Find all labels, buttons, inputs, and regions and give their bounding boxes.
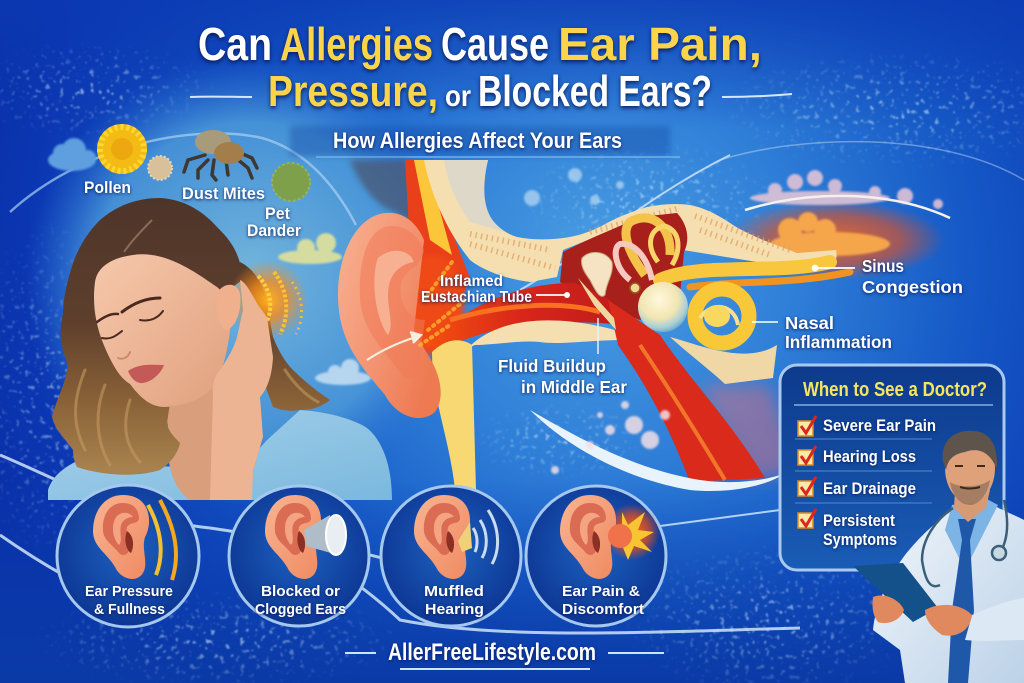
symptom: ear pressure: & Fullness xyxy=(94,601,165,618)
hair left and top xyxy=(52,198,258,475)
neck xyxy=(954,490,990,522)
label: pet dander: Pet xyxy=(265,204,290,223)
label: sinus congestion: Congestion xyxy=(862,277,963,297)
checklist: Severe Ear Pain xyxy=(823,417,936,435)
label: sinus congestion xyxy=(812,256,963,297)
ear xyxy=(216,285,240,330)
symptom: ear pain xyxy=(526,486,666,626)
tube highlight xyxy=(450,305,600,320)
pointer line: tube xyxy=(536,292,570,298)
label: pet dander xyxy=(247,204,301,240)
icon: pet dander xyxy=(272,163,310,201)
sinus glow xyxy=(725,200,945,280)
pink shade beside tube xyxy=(700,385,800,480)
symptom: blocked ears: Clogged Ears xyxy=(255,601,346,618)
symptom: blocked ears: Blocked or xyxy=(261,583,340,600)
label: inflamed eustachian tube: Inflamed xyxy=(440,273,503,290)
subtitle: How Allergies Affect Your Ears xyxy=(333,128,622,153)
label: nasal inflammation xyxy=(752,313,892,352)
eardrum xyxy=(578,278,616,330)
bone pale band xyxy=(444,160,505,232)
label: fluid buildup: Fluid Buildup xyxy=(498,356,606,376)
allergen dome xyxy=(10,55,475,505)
subtitle xyxy=(290,126,680,157)
doctor hands xyxy=(873,595,972,636)
label: pet dander: Dander xyxy=(247,221,301,240)
title xyxy=(198,18,762,116)
cochlea xyxy=(695,289,749,343)
symptom: ear pain: Discomfort xyxy=(562,601,644,618)
icon: pollen grain xyxy=(148,156,172,180)
lower bone xyxy=(468,320,624,348)
icon: yellow cloud xyxy=(278,233,342,264)
mouth xyxy=(128,365,164,383)
lower right bone xyxy=(670,337,777,384)
curved white band xyxy=(530,410,790,491)
yellow tissue stripe xyxy=(414,160,452,255)
outer ear xyxy=(338,213,441,418)
label: nasal inflammation: Nasal xyxy=(785,313,834,333)
neck and chest xyxy=(160,385,262,500)
eustachian tube xyxy=(425,283,620,350)
ear pain glow xyxy=(228,260,308,340)
woman with ear pain xyxy=(48,198,392,500)
doctor xyxy=(853,431,1024,683)
panel: symptom circles xyxy=(57,485,666,627)
label: fluid buildup xyxy=(498,356,627,397)
title: Cause xyxy=(441,18,549,70)
hair highlights xyxy=(76,370,318,465)
symptom: ear pressure xyxy=(57,485,199,627)
checklist: Persistent xyxy=(823,512,895,530)
checklist: Hearing Loss xyxy=(823,448,916,466)
icon: pollen flower xyxy=(97,124,147,174)
upper white particle cluster xyxy=(524,168,624,206)
head xyxy=(945,433,995,503)
label: inflamed eustachian tube xyxy=(421,273,532,306)
checklist xyxy=(795,416,936,549)
bone pores xyxy=(470,208,790,268)
right orange cloud xyxy=(770,212,890,256)
shirt xyxy=(48,410,392,500)
label: pollen: Pollen xyxy=(84,178,131,197)
inner fold highlight xyxy=(374,251,414,335)
label: sinus congestion: Sinus xyxy=(862,256,904,276)
checklist: Ear Drainage xyxy=(823,480,916,498)
arrow into ear canal xyxy=(367,332,421,360)
panel: when to see a doctor xyxy=(780,365,1004,570)
descending yellow tube xyxy=(432,340,476,490)
checklist: Symptoms xyxy=(823,531,897,549)
inflamed splatter xyxy=(400,255,464,355)
label: inflamed eustachian tube: Eustachian Tube xyxy=(421,289,532,306)
label: dust mites: Dust Mites xyxy=(182,184,265,203)
stapes xyxy=(630,283,640,293)
title side rules xyxy=(190,94,792,97)
hand and arm xyxy=(210,280,273,500)
hair right lock xyxy=(240,262,330,411)
pink clouds xyxy=(750,170,943,209)
tube orange highlight xyxy=(640,345,725,480)
symptom: muffled hearing: Muffled xyxy=(424,583,484,600)
website footer: AllerFreeLifestyle.com xyxy=(388,639,596,666)
upper bone xyxy=(424,160,837,282)
lower background shading xyxy=(0,480,1024,683)
ossicle xyxy=(581,252,612,296)
icon: dust mite xyxy=(184,130,257,180)
icon: cloud xyxy=(48,138,96,171)
symptom: ear pain: Ear Pain & xyxy=(562,583,640,600)
stethoscope xyxy=(922,500,1007,586)
pointer line: fluid xyxy=(597,318,599,354)
hair xyxy=(943,431,997,470)
hair parting xyxy=(124,220,152,252)
descending red tube xyxy=(608,300,765,482)
outer ear inner fold xyxy=(360,226,425,379)
top background shading xyxy=(0,0,1024,130)
hair behind anatomy xyxy=(350,160,416,225)
face xyxy=(94,254,232,407)
title: Allergies xyxy=(280,18,433,70)
title: Blocked Ears? xyxy=(478,67,712,116)
eyes and mouth xyxy=(955,466,985,488)
title: or xyxy=(445,80,471,113)
upper white band xyxy=(745,196,950,218)
symptom: muffled hearing xyxy=(381,486,521,626)
symptom: blocked ears xyxy=(229,486,369,626)
title: Pressure, xyxy=(268,67,438,116)
symptom: muffled hearing: Hearing xyxy=(425,601,484,618)
swoosh lines xyxy=(0,142,1024,633)
shirt xyxy=(945,498,998,570)
title: Ear Pain, xyxy=(558,18,762,70)
tie xyxy=(948,519,976,683)
middle ear cavity xyxy=(560,213,687,320)
ear anatomy cross-section xyxy=(338,160,950,491)
pearl vestibule xyxy=(638,282,688,332)
nerve bands xyxy=(660,262,850,287)
icon: white cloud xyxy=(315,359,371,385)
panel heading: When to See a Doctor? xyxy=(803,379,987,401)
symptom: ear pressure: Ear Pressure xyxy=(85,583,173,600)
title: Can xyxy=(198,18,272,70)
white particle cluster xyxy=(551,401,670,474)
label: fluid buildup: in Middle Ear xyxy=(521,377,627,397)
coat xyxy=(873,500,1024,683)
closed eyes and brows xyxy=(97,298,163,359)
label: nasal inflammation: Inflammation xyxy=(785,332,892,352)
upper tissue xyxy=(405,160,470,350)
splatter dots xyxy=(420,262,465,345)
clipboard xyxy=(853,563,938,622)
right sleeve xyxy=(965,598,1024,641)
semicircular canals xyxy=(616,218,678,280)
allergens xyxy=(48,124,371,385)
beard xyxy=(950,480,990,505)
